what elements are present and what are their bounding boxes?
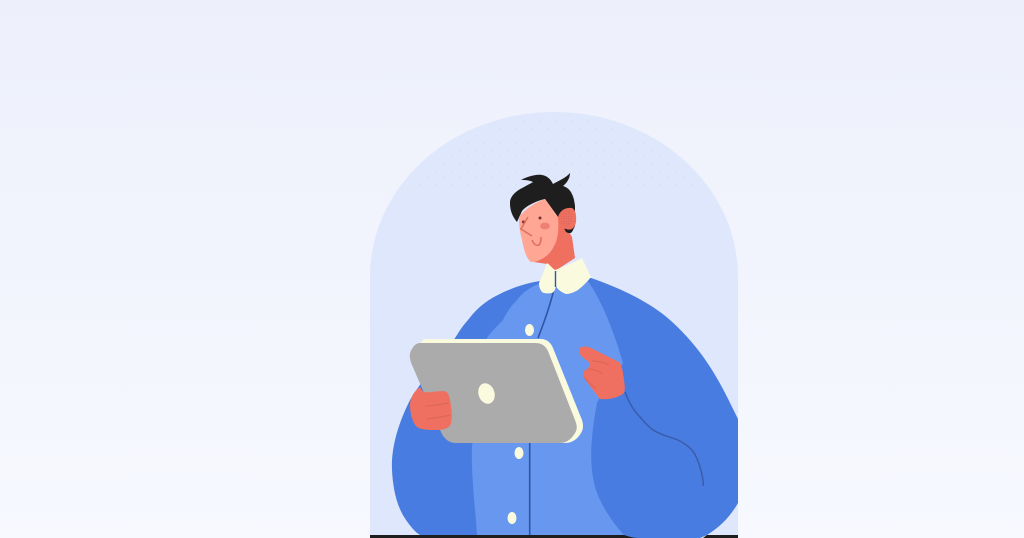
collar seam: [554, 271, 556, 287]
shirt seam: [538, 284, 555, 338]
floor bar: [370, 535, 738, 538]
sleeve crease: [625, 392, 704, 486]
neck: [534, 214, 575, 271]
face: [519, 199, 558, 262]
right hand: [579, 346, 625, 399]
cheek: [540, 223, 550, 229]
illustration: man holding tablet: [370, 112, 738, 538]
tablet: [410, 339, 583, 443]
tablet edge: [420, 339, 583, 443]
tablet screen: [410, 343, 577, 443]
eyes: [522, 220, 525, 224]
arch backdrop: [370, 112, 738, 538]
collar: [539, 258, 591, 294]
buttons: [508, 324, 534, 524]
mouth: [532, 237, 541, 245]
jacket body: [392, 278, 738, 538]
tablet camera: [476, 381, 497, 406]
figure: [370, 278, 738, 538]
left hand: [410, 387, 452, 430]
shirt seam lower: [529, 440, 531, 535]
nose: [521, 217, 532, 236]
ear: [558, 208, 576, 230]
hair: [510, 173, 575, 233]
shirt front: [472, 280, 624, 535]
